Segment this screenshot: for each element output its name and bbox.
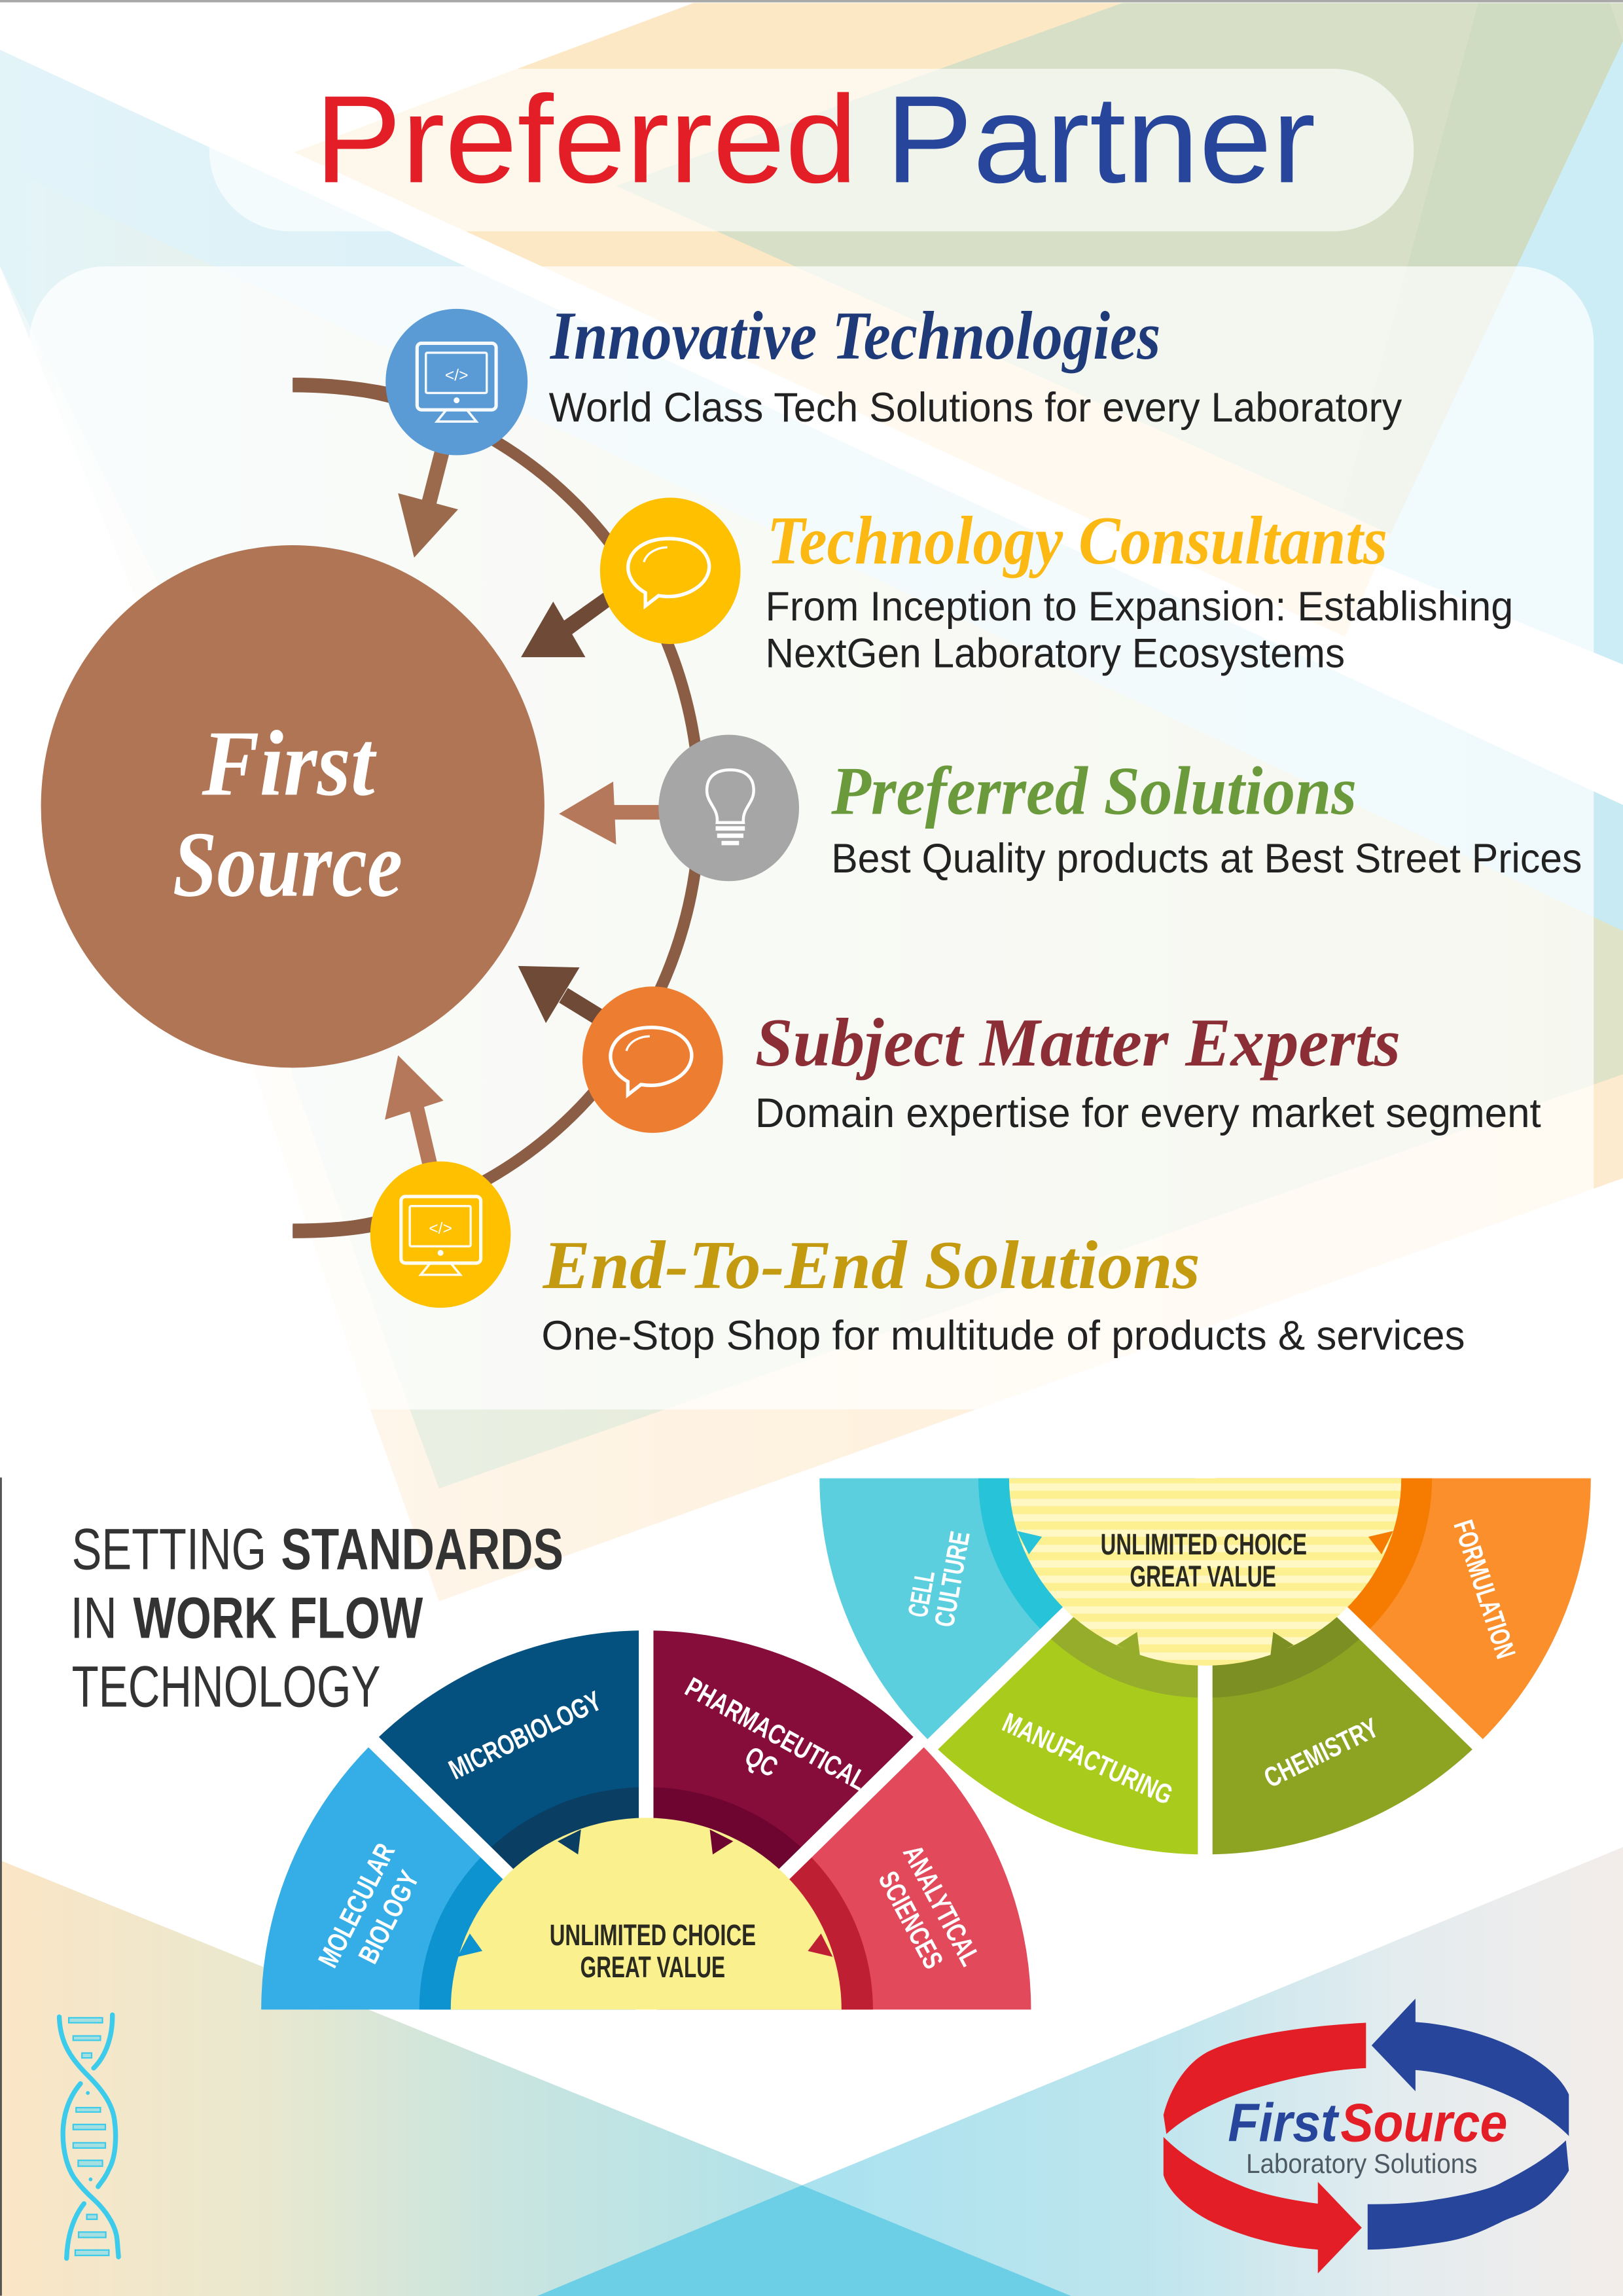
text: technology consultants: [766, 502, 1513, 677]
central circle: First Source: Source: [173, 812, 402, 916]
text: innovative technologies: [549, 297, 1402, 431]
text: end-to-end solutions: End-To-End Solutions: [543, 1227, 1200, 1303]
icon: monitor yellow: </>: [429, 1220, 452, 1238]
logo: FirstSource Laboratory Solutions: [1164, 1999, 1569, 2274]
title: Preferred Partner: Preferred: [315, 70, 857, 209]
icon: speech bubble orange: [582, 986, 723, 1133]
arrow: preferred solutions: [559, 781, 663, 844]
segment: pharmaceutical qc: [646, 1630, 918, 2009]
heading: setting standards in work flow technology: STANDARDS: [281, 1516, 563, 1581]
connecting arc: [293, 385, 700, 1231]
segment: chemistry: [1205, 1479, 1477, 1854]
icon: monitor yellow: [370, 1161, 510, 1308]
icon: speech bubble yellow: [600, 497, 741, 644]
arrow: technology consultants: [521, 590, 615, 657]
title: Preferred Partner: [315, 70, 1315, 209]
segment: manufacturing: [933, 1479, 1205, 1854]
segment: microbiology: [374, 1630, 646, 2009]
segment: molecular biology: MOLECULAR: [313, 1839, 401, 1973]
text: end-to-end solutions: [541, 1227, 1465, 1359]
text: end-to-end solutions: One-Stop Shop for multitude of products & services: [541, 1313, 1465, 1359]
text: technology consultants: From Inception to Expansion: Establishing: [766, 584, 1513, 630]
wheel: upper workflow wheel: [819, 1479, 1591, 1859]
text: technology consultants: Technology Consultants: [767, 502, 1387, 579]
segment: molecular biology: [261, 1742, 646, 2009]
text: innovative technologies: Innovative Technologies: [549, 297, 1160, 374]
hub: unlimited choice great value: [451, 1818, 842, 2009]
segment: manufacturing: MANUFACTURING: [998, 1708, 1177, 1811]
hub: unlimited choice great value: [1009, 1479, 1401, 1666]
text: subject matter experts: Subject Matter Experts: [755, 1004, 1400, 1081]
text: subject matter experts: [755, 1004, 1541, 1136]
segment: analytical sciences: ANALYTICAL: [897, 1840, 986, 1971]
segment: analytical sciences: [646, 1742, 1031, 2009]
icon: monitor blue: [385, 309, 527, 455]
segment: microbiology: MICROBIOLOGY: [444, 1686, 607, 1786]
heading: setting standards in work flow technology: TECHNOLOGY: [72, 1653, 380, 1719]
heading: setting standards in work flow technology: IN: [70, 1585, 117, 1650]
segment: molecular biology: BIOLOGY: [353, 1866, 425, 1969]
text: preferred solutions: Preferred Solutions: [830, 752, 1357, 829]
segment: formulation: FORMULATION: [1447, 1516, 1521, 1662]
central circle: First Source: First: [202, 711, 377, 815]
text: innovative technologies: World Class Tech Solutions for every Laboratory: [549, 385, 1402, 431]
title pill: [209, 69, 1414, 231]
hub: unlimited choice great value: GREAT VALUE: [580, 1950, 725, 1984]
segment: formulation: [1205, 1479, 1591, 1745]
text: preferred solutions: Best Quality products at Best Street Prices: [831, 836, 1582, 882]
segment: chemistry: CHEMISTRY: [1260, 1713, 1383, 1794]
title: Preferred Partner: Partner: [885, 70, 1315, 209]
central circle: First Source: [41, 545, 544, 1067]
arrow: end-to-end solutions: [385, 1055, 444, 1174]
panel: first source diagram: [29, 266, 1594, 1410]
icon: light bulb grey: [658, 735, 799, 881]
heading: setting standards in work flow technology: SETTING: [72, 1516, 266, 1581]
segment: cell culture: [819, 1479, 1205, 1745]
segment: cell culture: CULTURE: [929, 1529, 976, 1630]
logo: FirstSource Laboratory Solutions: First: [1228, 2092, 1340, 2153]
heading: setting standards in work flow technology: [70, 1516, 563, 1719]
heading: setting standards in work flow technology: WORK FLOW: [133, 1585, 423, 1650]
arrow: innovative technologies: [398, 445, 458, 558]
hub: unlimited choice great value: UNLIMITED CHOICE: [1101, 1528, 1307, 1561]
segment: pharmaceutical qc: PHARMACEUTICAL: [680, 1672, 872, 1797]
hub: unlimited choice great value: GREAT VALUE: [1130, 1560, 1276, 1593]
icon: monitor blue: </>: [445, 367, 468, 384]
logo: FirstSource Laboratory Solutions: Source: [1340, 2092, 1507, 2153]
hub: unlimited choice great value: UNLIMITED CHOICE: [550, 1918, 756, 1952]
text: subject matter experts: Domain expertise for every market segment: [755, 1090, 1541, 1136]
segment: pharmaceutical qc: QC: [740, 1741, 783, 1784]
icon: dna helix: [60, 2015, 118, 2259]
segment: cell culture: CELL: [902, 1568, 941, 1620]
arrow: subject matter experts: [518, 966, 606, 1026]
wheel: lower workflow wheel: [261, 1624, 1031, 2009]
text: preferred solutions: [830, 752, 1582, 882]
logo: FirstSource Laboratory Solutions: Laboratory Solutions: [1246, 2149, 1477, 2179]
text: technology consultants: NextGen Laboratory Ecosystems: [766, 631, 1345, 677]
segment: analytical sciences: SCIENCES: [872, 1867, 949, 1974]
